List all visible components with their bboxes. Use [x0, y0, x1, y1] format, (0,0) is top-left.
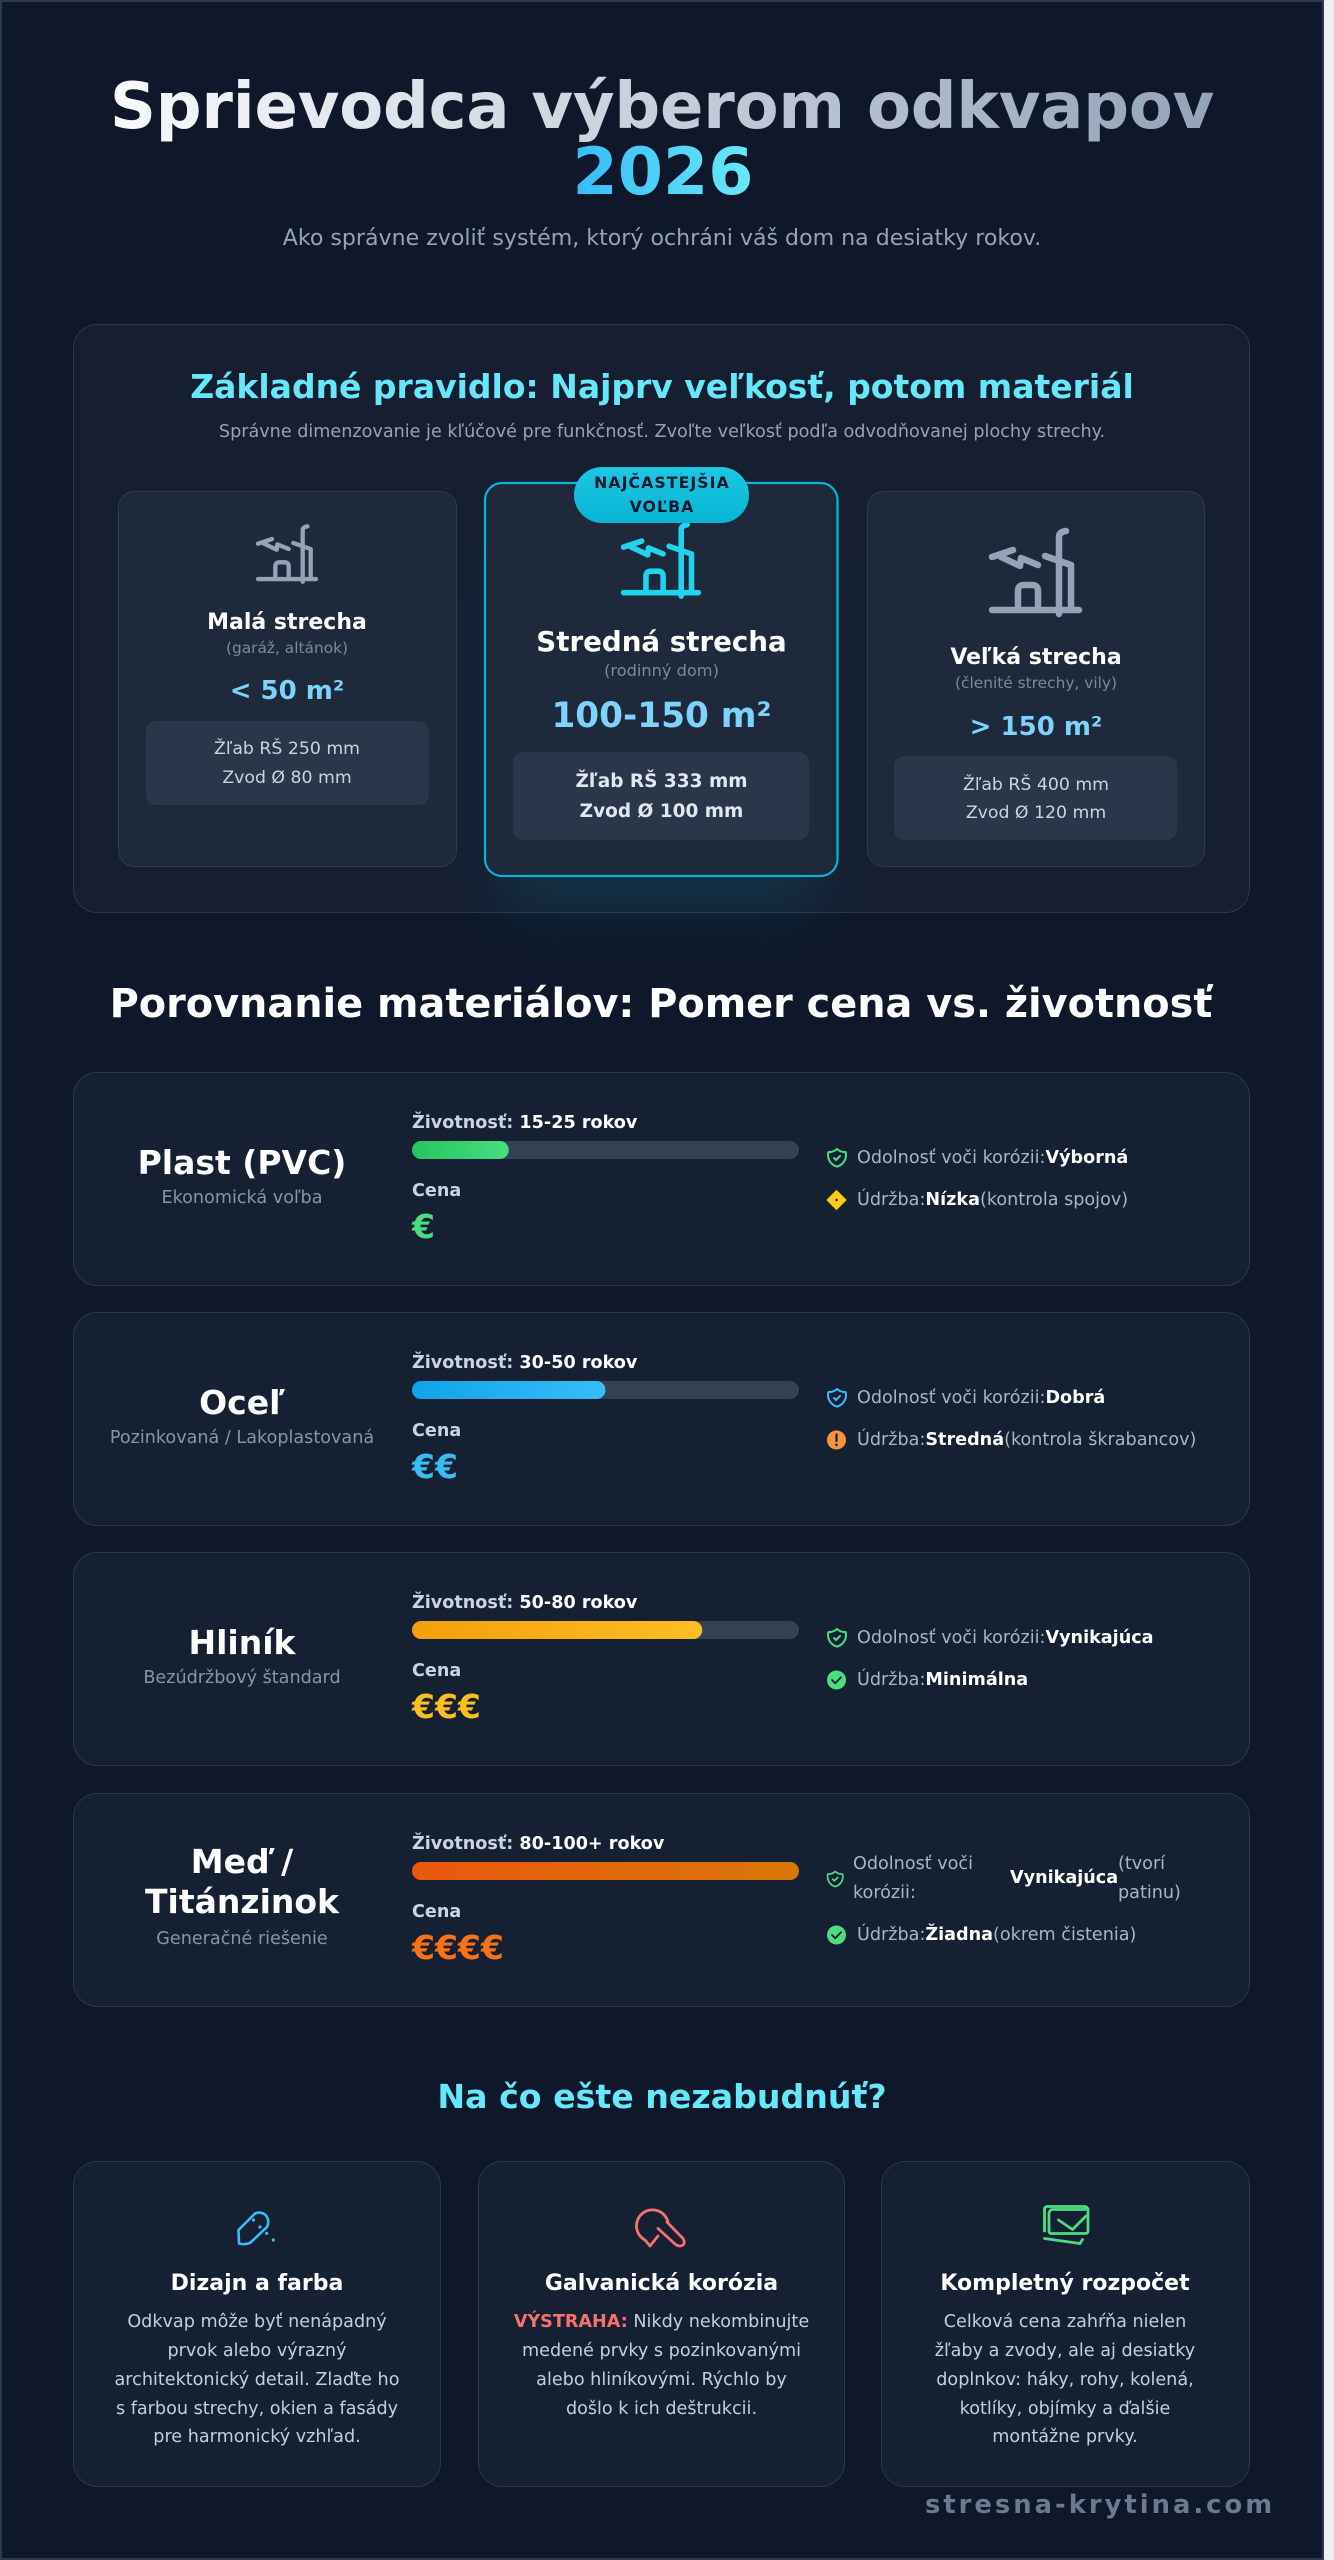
badge: most frequent choice: VOĽBA — [630, 497, 694, 516]
material name: Titánzinok — [145, 1882, 340, 1921]
corrosion resistance: (tvorí — [1118, 1854, 1166, 1874]
material name: Plast (PVC) — [138, 1143, 346, 1182]
tip title: Kompletný rozpočet — [940, 2271, 1190, 2296]
lifespan bar — [412, 1862, 799, 1880]
card note: (garáž, altánok) — [226, 639, 348, 657]
corrosion resistance: Odolnosť voči korózii:Dobrá — [857, 1388, 1105, 1408]
row: copper and titanium zinc — [74, 1794, 1250, 2006]
tip text: kotlíky, objímky a ďalšie — [960, 2399, 1170, 2419]
tip text: došlo k ich deštrukcii. — [566, 2399, 757, 2419]
material name: Hliník — [188, 1623, 297, 1662]
panel: basic rule — [74, 324, 1250, 912]
card title: Stredná strecha — [536, 625, 787, 658]
lifespan label: Životnosť: 15-25 rokov — [412, 1111, 638, 1133]
material note: Pozinkovaná / Lakoplastovaná — [110, 1428, 374, 1448]
badge: most frequent choice — [574, 467, 749, 523]
area value: > 150 m² — [970, 712, 1102, 742]
icon: warning circle — [827, 1430, 846, 1450]
card: medium roof (featured) — [485, 467, 838, 876]
tip text: Odkvap môže byť nenápadný — [127, 2312, 387, 2332]
price symbol: €€ — [411, 1447, 458, 1486]
icon: shield — [828, 1629, 846, 1647]
price symbol: €€€ — [411, 1687, 481, 1726]
title: Sprievodca výberom odkvapov — [110, 70, 1214, 144]
corrosion resistance: Odolnosť voči korózii:Vynikajúca — [857, 1628, 1154, 1648]
header: title and subtitle — [110, 70, 1214, 251]
price label: Cena — [412, 1181, 461, 1201]
price label: Cena — [412, 1661, 461, 1681]
tip card: budget — [882, 2162, 1250, 2486]
icon: paint brush capsule — [238, 2213, 275, 2244]
tip text: medené prvky s pozinkovanými — [522, 2341, 801, 2361]
spec box: Zvod Ø 100 mm — [580, 801, 743, 822]
lifespan label: Životnosť: 30-50 rokov — [412, 1351, 638, 1373]
tip text — [935, 2312, 1195, 2447]
tip text: žľaby a zvody, ale aj desiatky — [935, 2341, 1195, 2361]
row: steel — [74, 1312, 1250, 1526]
price symbol: €€€€ — [411, 1928, 504, 1967]
maintenance: Údržba:Nízka(kontrola spojov) — [857, 1188, 1128, 1210]
maintenance: Údržba:Stredná(kontrola škrabancov) — [857, 1428, 1196, 1450]
panel intro text: Správne dimenzovanie je kľúčové pre funkčnosť. Zvoľte veľkosť podľa odvodňovanej plochy strechy. — [219, 422, 1105, 442]
spec box: Zvod Ø 120 mm — [966, 803, 1106, 823]
lifespan bar — [412, 1381, 799, 1399]
lifespan label: Životnosť: 80-100+ rokov — [412, 1832, 665, 1854]
corrosion resistance: Vynikajúca — [1010, 1868, 1118, 1888]
icon: medium roof gutter — [624, 525, 698, 596]
tip text: VÝSTRAHA: Nikdy nekombinujte — [514, 2310, 809, 2332]
corrosion resistance: Odolnosť voči — [853, 1854, 973, 1874]
icon: corrosion warning — [636, 2210, 684, 2246]
price symbol: € — [411, 1207, 435, 1246]
corrosion resistance — [853, 1854, 1181, 1903]
maintenance: Údržba:Žiadna(okrem čistenia) — [857, 1923, 1136, 1945]
icon: budget check — [1044, 2206, 1088, 2244]
tip title: Dizajn a farba — [171, 2271, 343, 2296]
tip text: doplnkov: háky, rohy, kolená, — [936, 2370, 1194, 2390]
tip text: prvok alebo výrazný — [167, 2341, 347, 2361]
icon: check circle — [827, 1670, 846, 1690]
card title: Malá strecha — [207, 610, 367, 635]
tip title: Galvanická korózia — [545, 2271, 778, 2296]
lifespan bar — [412, 1141, 799, 1159]
icon: small roof gutter — [258, 526, 316, 582]
lifespan bar — [412, 1621, 799, 1639]
badge: most frequent choice: NAJČASTEJŠIA — [594, 473, 730, 492]
spec box: Žľab RŠ 250 mm — [214, 737, 360, 759]
tip text: s farbou strechy, okien a fasády — [116, 2399, 398, 2419]
tip card: design — [74, 2162, 440, 2486]
material note: Generačné riešenie — [156, 1929, 328, 1949]
icon: check circle — [827, 1926, 846, 1944]
material name — [145, 1842, 340, 1921]
price label: Cena — [412, 1421, 461, 1441]
tip text: montážne prvky. — [992, 2427, 1138, 2447]
lifespan label: Životnosť: 50-80 rokov — [412, 1591, 638, 1613]
maintenance: Údržba:Minimálna — [857, 1668, 1028, 1690]
material name: Oceľ — [199, 1383, 285, 1422]
icon: shield — [828, 1872, 843, 1887]
icon: diamond — [827, 1190, 846, 1210]
area value: < 50 m² — [230, 676, 344, 706]
tip text: Celková cena zahŕňa nielen — [944, 2312, 1186, 2332]
corrosion resistance: Odolnosť voči korózii:Výborná — [857, 1148, 1128, 1168]
tip text: pre harmonický vzhľad. — [153, 2427, 361, 2447]
material name: Meď / — [191, 1842, 294, 1881]
material note: Bezúdržbový štandard — [143, 1668, 341, 1688]
subtitle: Ako správne zvoliť systém, ktorý ochráni váš dom na desiatky rokov. — [283, 225, 1041, 251]
spec box — [894, 756, 1177, 840]
material note: Ekonomická voľba — [161, 1188, 323, 1208]
tip text — [514, 2310, 809, 2419]
spec box — [513, 752, 809, 840]
tip text — [115, 2312, 399, 2447]
panel heading: Základné pravidlo: Najprv veľkosť, potom materiál — [190, 367, 1134, 406]
watermark: stresna-krytina.com — [925, 2490, 1275, 2520]
spec box — [146, 721, 429, 805]
card: large roof — [868, 492, 1204, 866]
card note: (rodinný dom) — [604, 661, 719, 680]
tip text: architektonický detail. Zlaďte ho — [115, 2370, 399, 2390]
icon: shield — [828, 1149, 846, 1167]
spec box: Žľab RŠ 400 mm — [963, 773, 1109, 795]
title year: 2026 — [573, 135, 753, 210]
tip card: corrosion — [478, 2162, 844, 2486]
card title: Veľká strecha — [950, 645, 1122, 670]
area value: 100-150 m² — [551, 696, 772, 736]
price label: Cena — [412, 1902, 461, 1922]
corrosion resistance: korózii: — [853, 1883, 916, 1903]
spec box: Zvod Ø 80 mm — [222, 768, 352, 788]
card: small roof — [118, 492, 456, 866]
row: aluminium — [74, 1552, 1250, 1766]
section heading: reminders: Na čo ešte nezabudnúť? — [437, 2077, 887, 2116]
icon: shield — [828, 1389, 846, 1407]
tip text: alebo hliníkovými. Rýchlo by — [536, 2370, 787, 2390]
row: plastic — [74, 1072, 1250, 1286]
section heading: materials: Porovnanie materiálov: Pomer cena vs. životnosť — [110, 981, 1214, 1027]
corrosion resistance: patinu) — [1118, 1883, 1181, 1903]
icon: large roof gutter — [992, 531, 1079, 614]
spec box: Žľab RŠ 333 mm — [575, 770, 748, 792]
card note: (členité strechy, vily) — [955, 674, 1117, 692]
